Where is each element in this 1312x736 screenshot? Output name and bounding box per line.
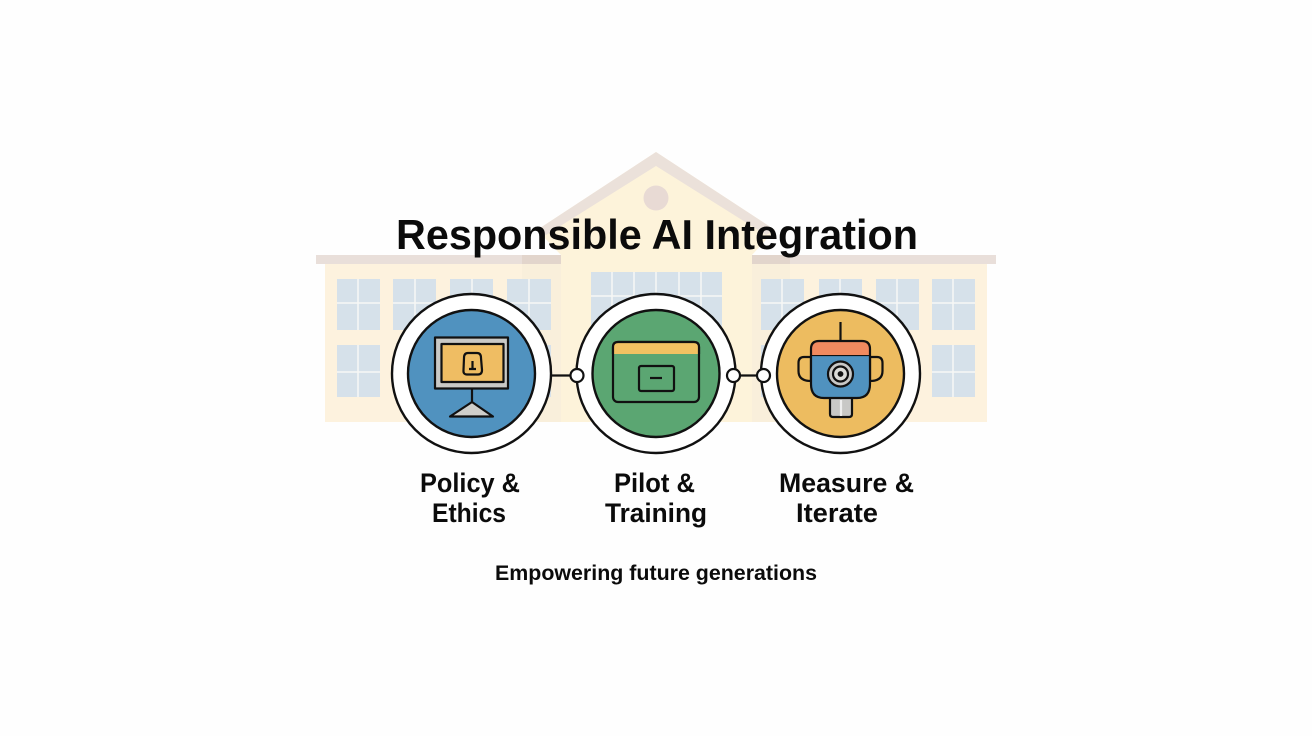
step 1 circle badge [392, 294, 551, 453]
label: policy and ethics: Policy & [420, 468, 520, 498]
label: measure and iterate [779, 468, 914, 528]
step 1: policy and ethics [392, 294, 551, 453]
title: Responsible AI Integration [396, 211, 918, 258]
icon: training window [613, 342, 699, 402]
building: windows [337, 272, 975, 397]
label: pilot and training [605, 468, 707, 528]
building: right wing [752, 255, 996, 422]
icon: monitor with lock [435, 338, 508, 416]
background school building [316, 152, 996, 422]
label: measure and iterate: Measure & [779, 468, 914, 498]
connectors between steps [552, 369, 770, 382]
building: central gable [537, 152, 775, 422]
step 2 circle badge [576, 294, 736, 453]
tagline: Empowering future generations [495, 562, 817, 585]
label: pilot and training: Pilot & [614, 468, 695, 498]
step 3 circle badge [761, 294, 920, 453]
label: policy and ethics [420, 468, 520, 528]
label: measure and iterate: Iterate [796, 498, 878, 528]
step 3: measure and iterate [761, 294, 920, 453]
label: pilot and training: Training [605, 498, 707, 528]
label: policy and ethics: Ethics [432, 498, 506, 528]
building: left wing [316, 255, 561, 422]
step 2: pilot and training [576, 294, 736, 453]
icon: robot with camera lens [798, 322, 882, 417]
